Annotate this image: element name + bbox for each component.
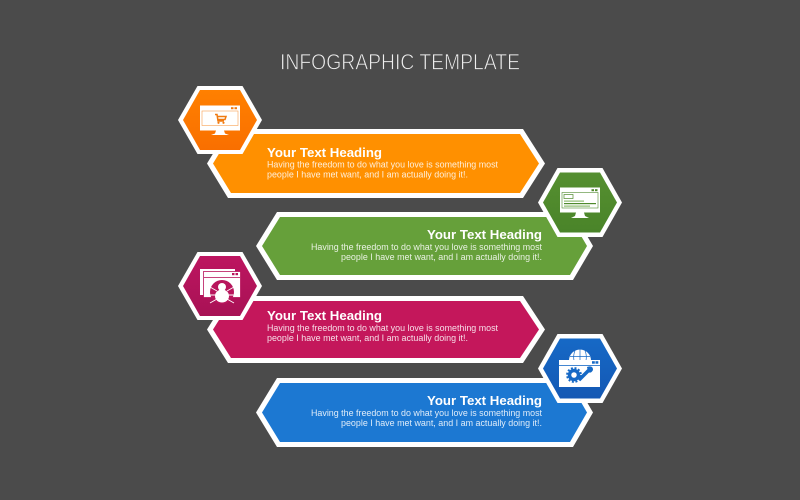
icon: blue hexagon with globe and tools window xyxy=(538,334,622,403)
text block: green: Having the freedom to do what you love is something most xyxy=(311,242,542,252)
panel: green banner xyxy=(256,212,593,280)
text block: magenta xyxy=(267,308,498,343)
text block: blue xyxy=(311,393,542,428)
text block: orange xyxy=(267,145,498,180)
text block: orange: Your Text Heading xyxy=(267,145,382,160)
icon: magenta hexagon with bug window xyxy=(178,252,262,320)
text block: orange: people I have met want, and I am actually doing it!. xyxy=(267,170,468,180)
text block: green: Your Text Heading xyxy=(427,227,542,242)
text block: blue: people I have met want, and I am actually doing it!. xyxy=(341,418,542,428)
text block: blue: Having the freedom to do what you love is something most xyxy=(311,408,542,418)
icon: orange hexagon with shopping monitor xyxy=(178,86,262,154)
text block: orange: Having the freedom to do what you love is something most xyxy=(267,160,498,170)
panel: blue banner xyxy=(256,378,593,447)
text block: blue: Your Text Heading xyxy=(427,393,542,408)
text block: green xyxy=(311,227,542,262)
panel: magenta banner xyxy=(207,296,545,363)
text block: magenta: people I have met want, and I am actually doing it!. xyxy=(267,333,468,343)
icon: green hexagon with code monitor xyxy=(538,168,622,237)
text block: magenta: Having the freedom to do what you love is something most xyxy=(267,323,498,333)
text block: green: people I have met want, and I am actually doing it!. xyxy=(341,252,542,262)
text block: magenta: Your Text Heading xyxy=(267,308,382,323)
title: INFOGRAPHIC TEMPLATE xyxy=(280,50,520,74)
panel: orange banner xyxy=(207,129,545,198)
